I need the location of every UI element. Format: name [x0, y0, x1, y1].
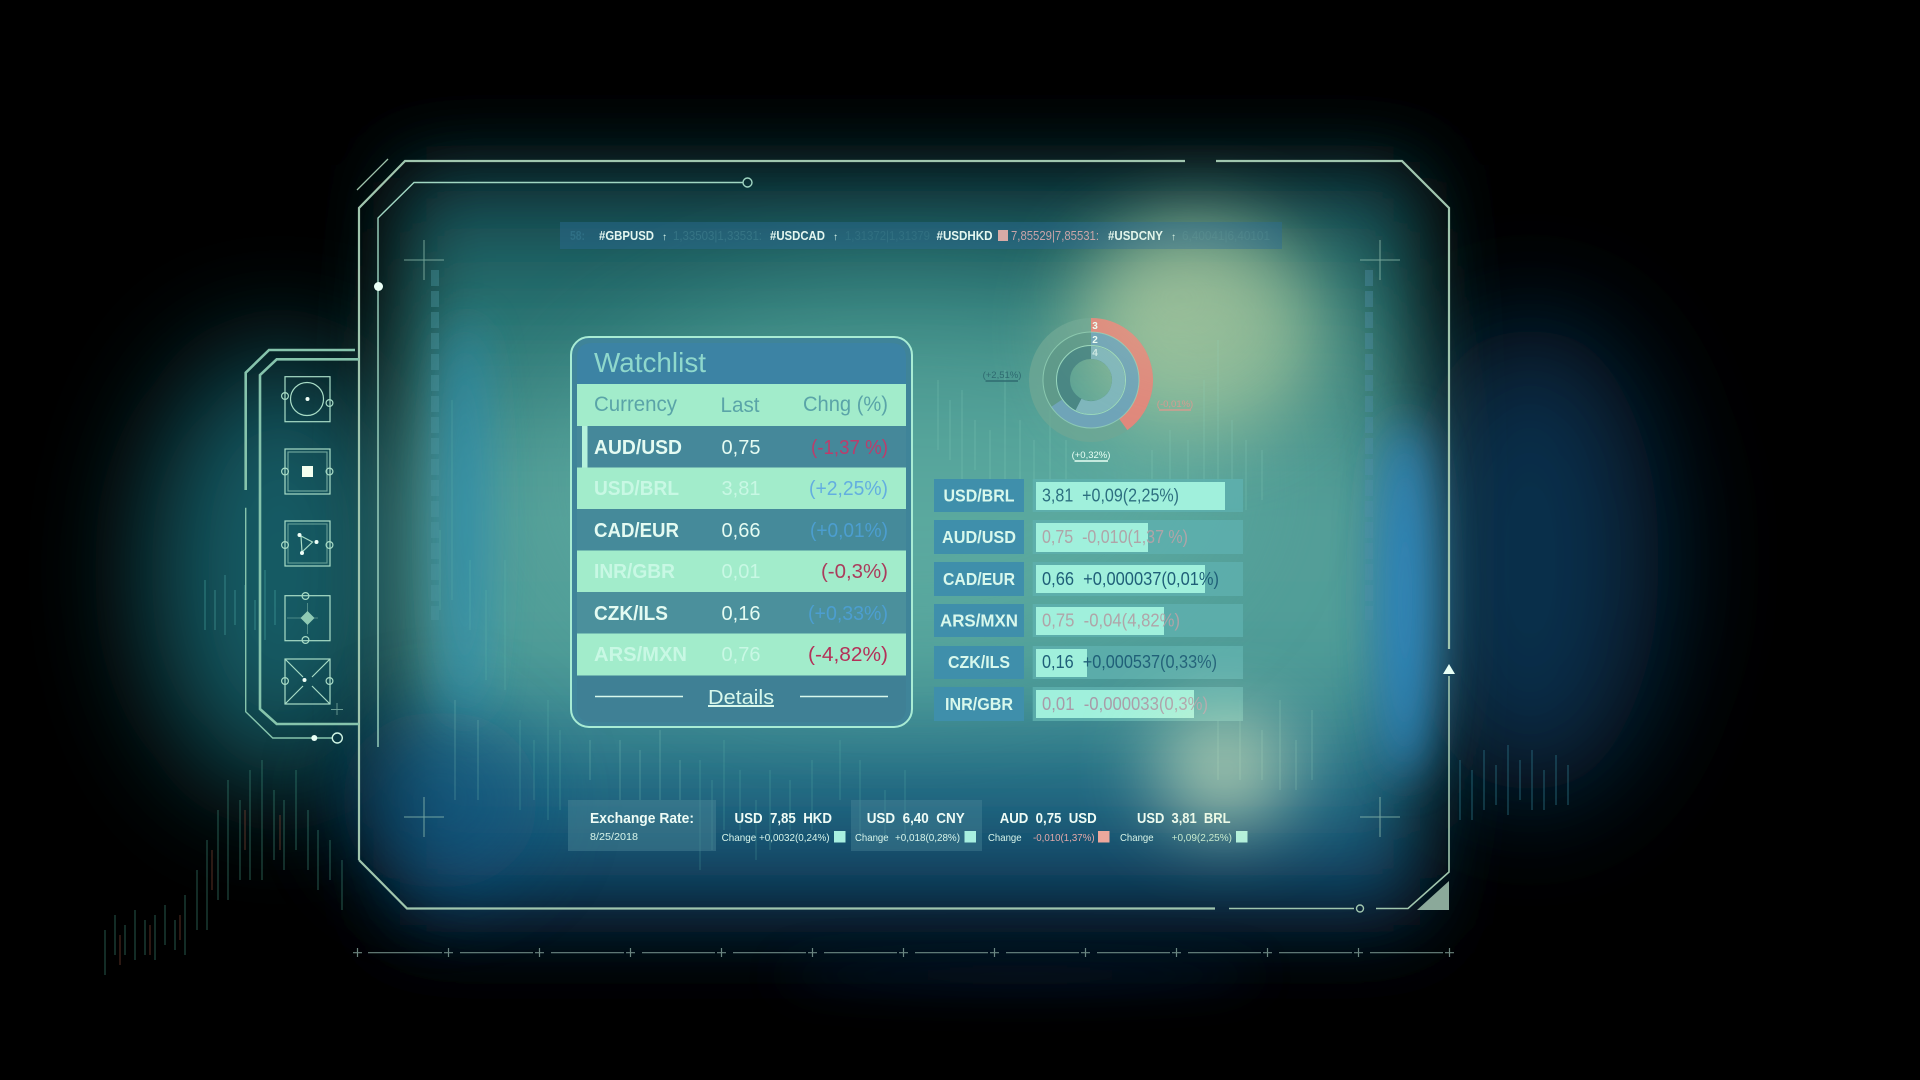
table: (-4,82%): [808, 644, 888, 666]
donut chart: 4: [1092, 348, 1098, 359]
ticker bar: ↑: [662, 232, 667, 243]
table: ARS/MXN: [594, 644, 687, 666]
icon: diamond: [285, 593, 330, 643]
table: USD/BRL: [594, 478, 679, 500]
ticker bar: ↑: [833, 232, 838, 243]
main HUD frame: [357, 159, 1449, 912]
exchange rate bar: +0,09(2,25%): [1172, 832, 1232, 844]
table: Last: [720, 394, 760, 417]
exchange rate bar: 8/25/2018: [590, 831, 638, 843]
list: currency pairs: CAD/EUR: [943, 569, 1015, 589]
ticker bar: 1,31372|1,31379: [845, 229, 930, 243]
exchange rate bar: [568, 800, 1248, 851]
ticker bar: [560, 222, 1282, 249]
table: (+2,25%): [809, 478, 888, 500]
list: currency pairs: 3,81 +0,09(2,25%): [1042, 486, 1179, 506]
background candlestick texture: [105, 340, 1568, 975]
exchange rate bar: Change +0,0032(0,24%): [722, 832, 830, 844]
donut labels: (+2,51%): [983, 370, 1021, 381]
exchange rate bar: Exchange Rate:: [590, 811, 694, 827]
inner thin frame: [374, 178, 752, 747]
icon: square: [282, 449, 333, 494]
bottom ruler: [353, 948, 1454, 957]
details link: Details: [708, 687, 774, 709]
title: Watchlist: [594, 347, 706, 378]
ticker bar: #USDCNY: [1108, 229, 1164, 243]
exchange rate bar: Change: [1120, 832, 1154, 844]
panel: watchlist: [571, 337, 912, 727]
table: Chng (%): [803, 393, 888, 416]
light glow overlays: [1100, 240, 1295, 825]
list: currency pairs: [934, 479, 1243, 721]
donut chart: 2: [1092, 335, 1098, 346]
list: currency pairs: INR/GBR: [945, 694, 1013, 714]
exchange rate bar: USD 3,81 BRL: [1137, 811, 1231, 827]
ticker bar: 1,33503|1,33531:: [673, 229, 762, 243]
table: (-0,3%): [821, 561, 888, 583]
table: AUD/USD: [594, 437, 682, 459]
exchange rate bar: USD 7,85 HKD: [734, 811, 832, 827]
table: 0,01: [722, 561, 760, 583]
exchange rate bar: +0,018(0,28%): [895, 832, 960, 844]
exchange rate bar: AUD 0,75 USD: [1000, 811, 1097, 827]
table: 0,75: [722, 437, 760, 459]
table: (+0,33%): [808, 603, 888, 625]
side tool panel: [246, 350, 359, 743]
list: currency pairs: 0,01 -0,000033(0,3%): [1042, 694, 1208, 714]
table: 0,66: [722, 520, 760, 542]
list: currency pairs: 0,16 +0,000537(0,33%): [1042, 652, 1217, 672]
list: currency pairs: 0,75 -0,010(1,37 %): [1042, 527, 1188, 547]
donut labels: (+0,32%): [1072, 450, 1110, 461]
table: [577, 384, 906, 676]
list: currency pairs: USD/BRL: [944, 486, 1015, 506]
icon: envelope cross: [282, 659, 343, 715]
ticker bar: #USDCAD: [770, 229, 825, 243]
donut chart: 3: [1092, 321, 1098, 332]
donut labels: (-0,01%): [1157, 399, 1193, 410]
ticker bar: 58:: [570, 229, 585, 243]
exchange rate bar: Change: [855, 832, 889, 844]
side dashes: [435, 270, 1369, 620]
corner crosses: [404, 240, 1400, 837]
ticker bar: ↑: [1171, 232, 1176, 243]
table: (+0,01%): [810, 520, 888, 542]
list: currency pairs: ARS/MXN: [940, 610, 1018, 630]
list: currency pairs: AUD/USD: [942, 527, 1016, 547]
exchange rate bar: Change: [988, 832, 1022, 844]
table: CZK/ILS: [594, 603, 668, 625]
table: 0,16: [722, 603, 760, 625]
corner triangle: [1417, 881, 1449, 910]
ticker bar: 7,85529|7,85531:: [1011, 229, 1099, 243]
exchange rate bar: USD 6,40 CNY: [867, 811, 965, 827]
ticker bar: #GBPUSD: [599, 229, 654, 243]
list: currency pairs: 0,66 +0,000037(0,01%): [1042, 569, 1219, 589]
list: currency pairs: 0,75 -0,04(4,82%): [1042, 610, 1180, 630]
up arrow: [1443, 664, 1455, 674]
table: 3,81: [722, 478, 760, 500]
table: CAD/EUR: [594, 520, 680, 542]
exchange rate bar: -0,010(1,37%): [1033, 832, 1095, 844]
background glow: [150, 165, 1660, 991]
table: Currency: [594, 393, 677, 416]
table: INR/GBR: [594, 561, 676, 583]
donut labels: [983, 370, 1193, 461]
table: (-1,37 %): [811, 437, 888, 459]
ticker bar: #USDHKD: [936, 229, 992, 243]
list: currency pairs: CZK/ILS: [948, 652, 1010, 672]
icon: triangle: [282, 521, 333, 566]
table: 0,76: [722, 644, 760, 666]
ticker bar: 6,40041|6,40101: [1182, 229, 1270, 243]
donut chart: [983, 321, 1193, 461]
icon: circle target: [282, 377, 333, 422]
